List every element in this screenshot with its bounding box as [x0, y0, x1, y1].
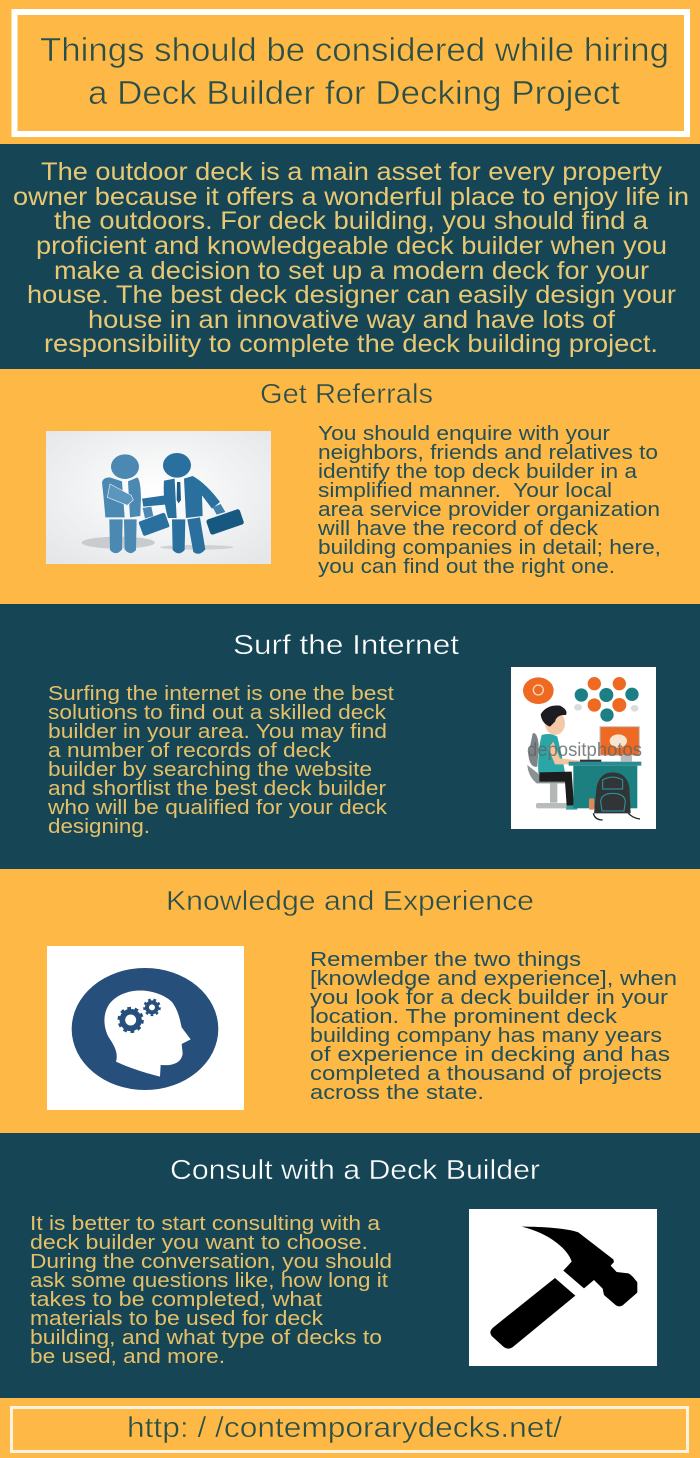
icon: two businessmen shaking hands [46, 431, 271, 564]
title [40, 31, 669, 111]
panel: website footer [0, 1398, 700, 1458]
heading: knowledge and experience: Knowledge and Experience [166, 885, 534, 916]
icon: hammer [469, 1209, 657, 1366]
referrals text: building companies in detail; here, [318, 537, 661, 559]
knowledge text: across the state. [310, 1082, 484, 1104]
icon: person working at a computer [511, 667, 656, 829]
intro text [13, 158, 689, 358]
intro text: responsibility to complete the deck building project. [44, 330, 658, 358]
surf text: and shortlist the best deck builder [48, 778, 386, 800]
intro text: make a decision to set up a modern deck for your [54, 257, 649, 285]
intro text: The outdoor deck is a main asset for every property [41, 158, 663, 186]
referrals text: identify the top deck builder in a [318, 461, 638, 483]
intro text: the outdoors. For deck building, you should find a [54, 207, 648, 235]
title: a Deck Builder for Decking Project [88, 74, 620, 111]
consult text: During the conversation, you should [30, 1251, 392, 1273]
referrals text: You should enquire with your [318, 423, 610, 445]
consult text: building, and what type of decks to [30, 1327, 382, 1349]
consult text: materials to be used for deck [30, 1308, 324, 1330]
referrals text: neighbors, friends and relatives to [318, 442, 658, 464]
title: Things should be considered while hiring [40, 31, 669, 68]
knowledge text: [knowledge and experience], when [310, 968, 677, 990]
referrals text: simplified manner. Your local [318, 480, 612, 502]
surf text: builder in your area. You may find [48, 721, 387, 743]
consult text: be used, and more. [30, 1346, 225, 1368]
surf text: builder by searching the website [48, 759, 372, 781]
heading: surf the internet: Surf the Internet [233, 629, 459, 660]
knowledge text: building company has many years [310, 1025, 662, 1047]
panel: introduction [0, 144, 700, 369]
consult text: takes to be completed, what [30, 1289, 323, 1311]
referrals text: will have the record of deck [317, 518, 599, 540]
referrals text: area service provider organization [318, 499, 660, 521]
surf text [47, 683, 395, 838]
knowledge text: of experience in decking and has [310, 1044, 670, 1066]
consult text: ask some questions like, how long it [30, 1270, 388, 1292]
intro text: house. The best deck designer can easily design your [27, 281, 676, 309]
panel: knowledge and experience [0, 869, 700, 1133]
heading: consult with a deck builder: Consult with a Deck Builder [170, 1154, 540, 1185]
heading: get referrals: Get Referrals [260, 378, 433, 409]
consult text: It is better to start consulting with a [30, 1213, 381, 1235]
watermark: depositphotos [527, 740, 642, 761]
title panel [14, 12, 687, 134]
consult text [30, 1213, 392, 1368]
intro text: owner because it offers a wonderful place to enjoy life in [13, 183, 689, 211]
knowledge text: completed a thousand of projects [310, 1063, 662, 1085]
surf text: Surfing the internet is one the best [48, 683, 395, 705]
surf text: who will be qualified for your deck [47, 797, 388, 819]
surf text: a number of records of deck [48, 740, 332, 762]
panel: get referrals [0, 369, 700, 604]
intro text: proficient and knowledgeable deck builder when you [36, 232, 667, 260]
surf text: designing. [48, 816, 150, 838]
panel: surf the internet [0, 604, 700, 869]
website url: http: / /contemporarydecks.net/ [127, 1412, 563, 1444]
referrals text [317, 423, 661, 578]
knowledge text: you look for a deck builder in your [310, 987, 668, 1009]
surf text: solutions to find out a skilled deck [48, 702, 387, 724]
knowledge text: Remember the two things [310, 949, 581, 971]
knowledge text [310, 949, 677, 1104]
panel: consult with a deck builder [0, 1133, 700, 1398]
referrals text: you can find out the right one. [318, 556, 615, 578]
knowledge text: location. The prominent deck [310, 1006, 618, 1028]
icon: head with gears [47, 946, 244, 1110]
intro text: house in an innovative way and have lots of [88, 306, 615, 334]
consult text: deck builder you want to choose. [30, 1232, 368, 1254]
